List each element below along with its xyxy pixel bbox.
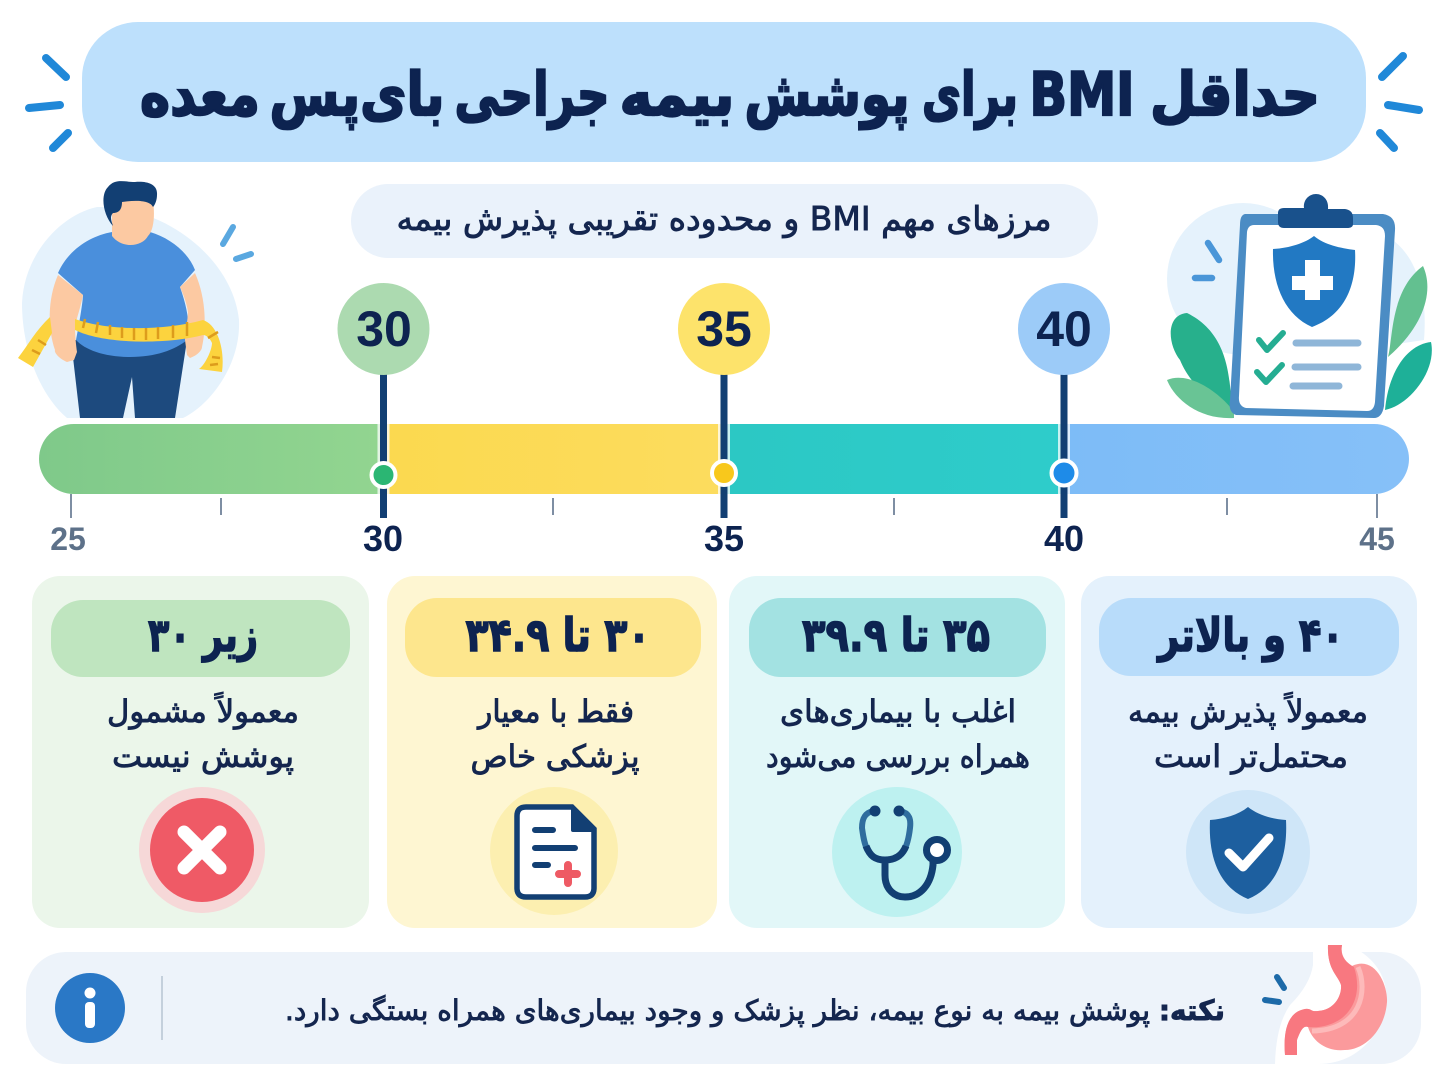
subtitle pill — [351, 184, 1098, 258]
marker 30: 30 — [356, 301, 412, 357]
illustration: insurance clipboard — [1167, 194, 1432, 418]
tick labels: 40 — [1044, 518, 1084, 559]
title: حداقل — [1150, 60, 1320, 130]
panel: 30 to 34.9: فقط با معیار — [476, 694, 634, 730]
title: بای‌پس — [270, 60, 444, 130]
panel: 40 and above: معمولاً پذیرش بیمه — [1128, 691, 1368, 730]
tick labels: 35 — [704, 518, 744, 559]
panel: 30 to 34.9 — [387, 576, 717, 928]
icon: stomach — [1275, 945, 1387, 1064]
panel: 35 to 39.9 — [729, 576, 1065, 928]
note bar — [26, 945, 1421, 1064]
panel: under 30: پوشش نیست — [112, 739, 294, 775]
title banner — [82, 22, 1366, 162]
tick labels: 30 — [363, 518, 403, 559]
marker 35: 35 — [696, 301, 752, 357]
marker 40 — [1018, 283, 1110, 518]
icon: shield check — [1186, 790, 1310, 914]
marker 40: 40 — [1036, 301, 1092, 357]
panel: under 30: زیر ۳۰ — [148, 608, 258, 662]
icon: right title rays — [1380, 56, 1419, 148]
panel: under 30: معمولاً مشمول — [107, 691, 299, 730]
tick labels — [50, 518, 1395, 559]
icon: note sparks — [1265, 977, 1284, 1002]
panel: 35 to 39.9: ۳۵ تا ۳۹.۹ — [802, 608, 990, 662]
tick labels: 45 — [1359, 521, 1395, 557]
BMI scale bar — [39, 424, 1409, 559]
title: معده — [140, 60, 260, 130]
title: پوشش — [744, 60, 910, 130]
title — [140, 60, 1320, 130]
icon: info — [55, 973, 125, 1043]
panel: 40 and above: ۴۰ و بالاتر — [1156, 608, 1344, 662]
panel: under 30 — [32, 576, 369, 928]
panel: 30 to 34.9: ۳۰ تا ۳۴.۹ — [466, 608, 650, 662]
title: بیمه — [620, 60, 734, 130]
icon: red x — [139, 787, 265, 913]
subtitle pill: مرزهای مهم BMI و محدوده تقریبی پذیرش بیمه — [396, 199, 1052, 238]
panel: 40 and above: محتمل‌تر است — [1154, 739, 1348, 775]
icon: stethoscope — [832, 787, 962, 917]
title: جراحی — [454, 60, 610, 130]
title: برای — [922, 60, 1018, 130]
icon: left title rays — [29, 58, 68, 148]
tick labels: 25 — [50, 521, 86, 557]
panel: 35 to 39.9: اغلب با بیماری‌های — [780, 694, 1016, 730]
title: BMI — [1030, 60, 1134, 130]
marker 30 — [338, 283, 430, 518]
panel: 40 and above — [1081, 576, 1417, 928]
panel: 35 to 39.9: همراه بررسی می‌شود — [766, 739, 1030, 775]
note text: نکته: پوشش بیمه به نوع بیمه، نظر پزشک و وجود بیماری‌های همراه بستگی دارد. — [285, 994, 1225, 1027]
illustration: person with measuring tape — [18, 181, 251, 418]
panel: 30 to 34.9: پزشکی خاص — [470, 739, 640, 775]
icon: medical document — [490, 787, 618, 915]
marker 35 — [678, 283, 770, 518]
